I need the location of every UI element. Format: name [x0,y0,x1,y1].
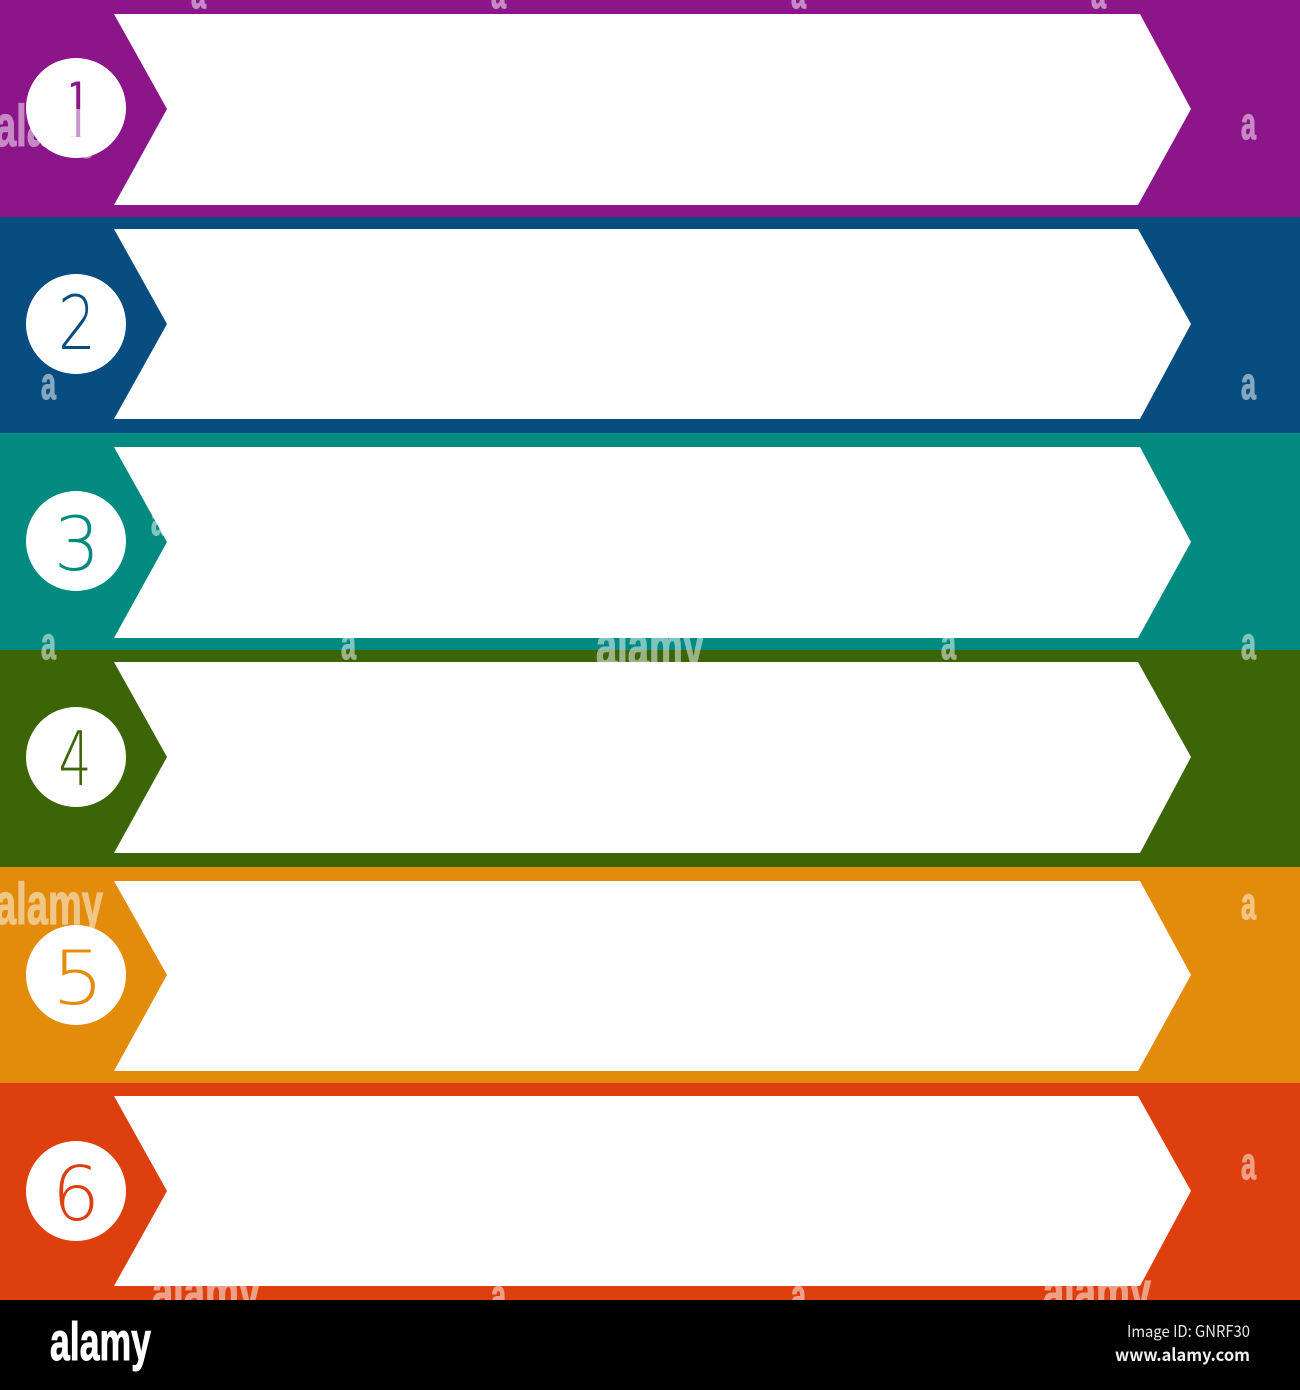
footer logo: alamy [50,1312,151,1372]
number badge 4: 4 [58,715,92,803]
stock watermarks: a [341,618,357,669]
arrow panel 3 [114,447,1191,638]
number badge 1 [26,58,126,159]
arrow panel 5 [114,881,1191,1071]
stock watermarks: a [1241,878,1257,929]
number badge 6 [26,1141,126,1241]
number badge 3 [26,491,126,591]
stock watermarks: a [1241,98,1257,149]
stock watermarks: a [151,494,167,545]
footer bar [0,1300,1300,1390]
number badge 4 [26,707,126,807]
arrow panel 6 [114,1096,1191,1286]
stock watermarks: alamy [1043,1260,1151,1325]
number badge 1: 1 [52,66,102,159]
stock watermarks: a [491,1270,507,1321]
row 1: purple [26,14,1191,205]
stock watermarks: a [1241,1138,1257,1189]
number badge 2 [26,274,126,374]
stock watermarks: a [41,358,57,409]
row 6: red [26,1096,1191,1286]
stock watermarks: alamy [152,1260,260,1325]
stock watermarks: a [1241,358,1257,409]
arrow panel 2 [114,229,1191,419]
stock watermarks: a [941,618,957,669]
row 5: orange [26,881,1191,1071]
stock watermarks: a [1241,618,1257,669]
row 4: green [26,662,1191,853]
number badge 5: 5 [52,934,104,1022]
arrow panel 4 [114,662,1191,853]
stock watermarks: a [791,1270,807,1321]
row 2: blue [26,229,1191,419]
image id: Image ID: GNRF30 [1127,1318,1250,1342]
number badge 5 [26,925,126,1025]
stock watermarks: a [41,618,57,669]
row 3: teal [26,447,1191,638]
stock watermarks: alamy [596,614,704,679]
number badge 3: 3 [54,500,100,588]
arrow panel 1 [114,14,1191,205]
website: www.alamy.com [1115,1341,1250,1366]
number badge 2: 2 [58,279,96,367]
number badge 6: 6 [52,1150,100,1238]
